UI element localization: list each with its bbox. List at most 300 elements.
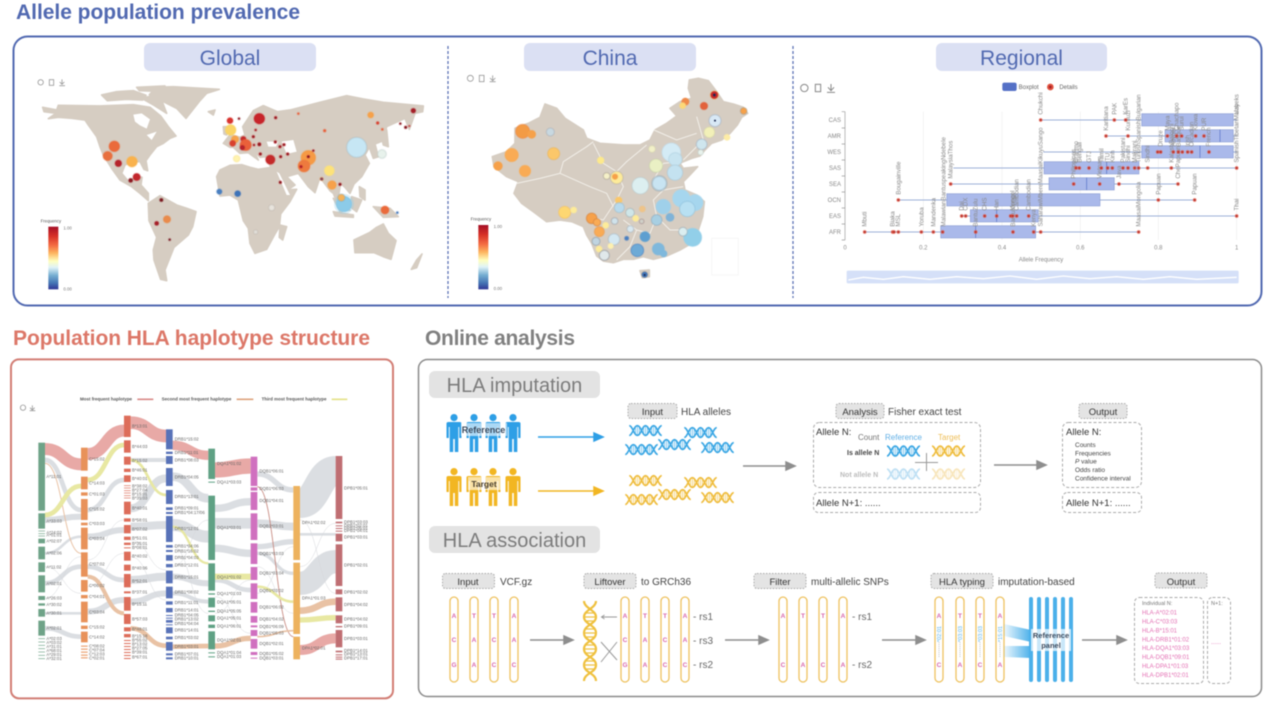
box: allele N contingency table: Reference bbox=[885, 433, 922, 442]
allele labels: B*15:11 bbox=[132, 601, 148, 606]
y axis labels: CAS bbox=[829, 118, 841, 124]
China bubble centres bbox=[644, 94, 716, 276]
x axis labels: 1 bbox=[1235, 245, 1239, 251]
allele labels: DPA1*01:03 bbox=[302, 595, 326, 600]
allele labels: DRB1*04:17/06 bbox=[175, 510, 205, 515]
allele labels: A*02:01 bbox=[46, 581, 62, 586]
allele labels: A*03:02 bbox=[46, 640, 62, 645]
allele labels: A*68:01 bbox=[46, 648, 62, 653]
allele labels: DPB1*02:02 bbox=[344, 589, 368, 594]
group: input haplotype bars: A bbox=[472, 662, 477, 669]
rotated sample labels: Pakistani bbox=[1120, 138, 1127, 163]
allele labels: B*57:03 bbox=[132, 616, 148, 621]
allele labels: DQA1*06:01 bbox=[217, 624, 242, 629]
allele labels: B*38:02 bbox=[132, 484, 148, 489]
allele labels: B*40:01 bbox=[132, 476, 148, 481]
rotated sample labels: French bbox=[1206, 127, 1213, 147]
rotated sample labels: Kinh bbox=[1109, 150, 1116, 163]
allele labels: DPB1*05:01 bbox=[344, 526, 368, 531]
rotated sample labels: KarEs bbox=[1123, 98, 1130, 115]
rotated sample labels: Philippines bbox=[1071, 149, 1078, 179]
box: individual N alleles: Individual N: bbox=[1142, 601, 1173, 607]
allele labels: DQA1*03:03 bbox=[217, 479, 242, 484]
group: liftover haplotype bars: A bbox=[683, 613, 688, 620]
group: input haplotype bars: T bbox=[472, 613, 476, 620]
allele labels: C*07:04 bbox=[89, 648, 105, 653]
allele labels: DQB1*06:01 bbox=[259, 468, 284, 473]
rotated sample labels: Java bbox=[1116, 165, 1123, 179]
group: input haplotype bars: A bbox=[512, 637, 517, 644]
allele labels: DQA1*05:01 bbox=[217, 600, 242, 605]
legend: frequency colour bar bbox=[41, 218, 72, 291]
rotated sample labels: Karitiana bbox=[1103, 106, 1110, 131]
allele labels: C*03:04 bbox=[89, 536, 105, 541]
rotated sample labels: Brahmo bbox=[1073, 141, 1080, 163]
group: target people: Target bbox=[471, 479, 497, 489]
group: liftover haplotype bars: A bbox=[643, 662, 648, 669]
allele labels: DPB1*05:01 bbox=[344, 485, 368, 490]
allele labels: DQA1*01:03 bbox=[217, 654, 242, 659]
legend: China frequency colour bar: Frequency bbox=[471, 217, 492, 222]
data zoom slider bbox=[847, 271, 1239, 283]
allele labels: B*35:03 bbox=[132, 495, 148, 500]
label: input VCF: Input bbox=[457, 577, 479, 588]
allele labels: A*31:01 bbox=[46, 644, 62, 649]
y axis labels: SAS bbox=[829, 166, 841, 172]
arrow: analysis to output bbox=[994, 461, 1046, 469]
panel: allele population prevalence bbox=[14, 36, 1262, 306]
legend: haplotype ranks: Third most frequent haplotype bbox=[262, 397, 327, 402]
allele labels: B*52:01 bbox=[132, 578, 148, 583]
label: filter: Filter bbox=[769, 577, 791, 588]
rotated sample labels: Basque bbox=[1176, 125, 1183, 147]
group: filtered haplotype bars: T bbox=[801, 613, 805, 620]
allele labels: B*07:02 bbox=[132, 527, 148, 532]
allele labels: A*29:01 bbox=[46, 652, 62, 657]
rotated sample labels: Mandenka bbox=[930, 197, 937, 227]
allele labels: DQA1*05:01 bbox=[217, 615, 242, 620]
group: liftover haplotype bars: T bbox=[663, 613, 667, 620]
box: output statistics: P value bbox=[1075, 458, 1097, 466]
panel: haplotype sankey bbox=[11, 359, 393, 698]
heading pill: Regional bbox=[936, 43, 1107, 71]
group: typing haplotype bars: *03:03 bbox=[958, 626, 964, 642]
China map chart bbox=[467, 75, 748, 291]
legend: haplotype ranks bbox=[80, 397, 347, 402]
allele labels: B*15:01 bbox=[132, 492, 148, 497]
allele labels: DRB1*04:04 bbox=[175, 621, 199, 626]
allele labels: A*11:01 bbox=[46, 474, 62, 479]
allele labels: A*30:01 bbox=[46, 610, 62, 615]
allele labels: B*27:05 bbox=[132, 646, 148, 651]
x axis labels: 0 bbox=[843, 245, 847, 251]
column: HLA-C bbox=[81, 448, 88, 658]
reference panel: panel bbox=[1041, 641, 1061, 650]
group: liftover haplotype bars: A bbox=[623, 613, 628, 620]
allele labels: DQB1*03:04 bbox=[259, 571, 284, 576]
box: individual N+1: ...... bbox=[1211, 640, 1221, 646]
label: association output: Output bbox=[1167, 577, 1196, 588]
group: reference people bbox=[446, 414, 520, 452]
most frequent haplotype flow bbox=[45, 423, 336, 650]
allele labels: DRB1*04:03 bbox=[175, 555, 199, 560]
box: individual N alleles: HLA-DQA1*03:03 bbox=[1142, 646, 1190, 652]
allele labels: DRB1*11:01 bbox=[175, 450, 199, 455]
title: allele population prevalence: Allele population prevalence bbox=[16, 1, 300, 24]
allele labels: DQA1*01:02 bbox=[217, 461, 242, 466]
allele labels: C*01:03 bbox=[89, 491, 105, 496]
group: liftover haplotype bars: - rs3 bbox=[693, 636, 713, 647]
group: liftover haplotype bars: C bbox=[683, 662, 688, 669]
x axis labels: 0.2 bbox=[919, 245, 928, 251]
label: analysis Fisher exact test: Analysis bbox=[842, 407, 878, 418]
allele labels: DRB1*14:01 bbox=[175, 628, 199, 633]
allele labels: DQB1*06:09 bbox=[259, 624, 284, 629]
allele labels: DRB1*04:06 bbox=[175, 544, 199, 549]
label: liftover: to GRCh36 bbox=[641, 577, 691, 588]
heading pill: China bbox=[524, 43, 696, 71]
column: HLA-DPB1 bbox=[336, 456, 342, 660]
arrow: reference to alleles bbox=[538, 433, 603, 441]
allele labels: DQB1*03:01 bbox=[259, 524, 284, 529]
allele labels: A*02:01 bbox=[46, 625, 62, 630]
rotated sample labels: KalashBalochi bbox=[1168, 124, 1175, 163]
allele labels: A*11:02 bbox=[46, 565, 62, 570]
rotated sample labels: MSL bbox=[895, 213, 902, 227]
rotated sample labels bbox=[862, 92, 1241, 227]
allele labels: C*03:04 bbox=[89, 609, 105, 614]
column: HLA-DQA1 bbox=[208, 449, 215, 657]
group: liftover haplotype bars bbox=[621, 597, 713, 682]
group: filtered haplotype bars bbox=[779, 597, 872, 682]
group: typing haplotype bars: *02:01 bbox=[937, 626, 943, 642]
panel: online analysis bbox=[418, 360, 1262, 696]
box: individual N alleles: HLA-DPA1*01:03 bbox=[1142, 664, 1189, 670]
allele labels: A*24:02 bbox=[46, 530, 62, 535]
allele labels: DQA1*01:02 bbox=[217, 574, 242, 579]
rotated sample labels: Sindhi bbox=[1125, 146, 1132, 163]
allele labels: DRB1*04:05 bbox=[175, 613, 199, 618]
rotated sample labels: TurkishSpanishBulgarian bbox=[1136, 94, 1143, 163]
box: output statistics: Allele N: bbox=[1066, 427, 1101, 438]
rotated sample labels: Irish bbox=[1184, 134, 1191, 147]
rotated sample labels: PAK bbox=[1111, 102, 1118, 115]
rotated sample labels: Bougainville bbox=[896, 161, 903, 195]
group: reference DNA bbox=[625, 426, 734, 454]
icon: vertical DNA helix bbox=[584, 601, 596, 681]
arrow: input to liftover bbox=[530, 636, 573, 644]
data bubbles: China bbox=[494, 91, 747, 278]
label: input HLA alleles: Input bbox=[642, 407, 663, 418]
label: output: Output bbox=[1089, 407, 1118, 418]
label: output bbox=[1079, 404, 1127, 418]
box: allele N contingency table: Not allele N bbox=[840, 472, 878, 479]
rotated sample labels: Thai bbox=[1234, 199, 1241, 211]
title: population HLA haplotype structure: Population HLA haplotype structure bbox=[13, 327, 370, 350]
rotated sample labels: Biaka bbox=[890, 211, 897, 227]
rotated sample labels: Sindhi bbox=[1145, 146, 1152, 163]
allele labels: DRB1*13:02 bbox=[175, 617, 199, 622]
group: target DNA bbox=[625, 476, 734, 504]
rotated sample labels: Vietnam bbox=[1097, 156, 1104, 179]
label: filter: multi-allelic SNPs bbox=[811, 577, 889, 588]
box: output statistics: Frequencies bbox=[1075, 450, 1112, 458]
data bubbles: global bbox=[103, 108, 416, 241]
box: output statistics: Odds ratio bbox=[1075, 467, 1105, 474]
group: filtered haplotype bars: T bbox=[821, 613, 825, 620]
allele labels: DPB1*02:01 bbox=[344, 523, 368, 528]
allele labels: DRB1*14:01 bbox=[175, 607, 199, 612]
x axis labels: 0.8 bbox=[1154, 245, 1163, 251]
title: online analysis: Online analysis bbox=[425, 327, 575, 350]
arrow: target to alleles bbox=[538, 487, 603, 495]
box: output N+1: Allele N+1: ...... bbox=[1066, 498, 1131, 509]
allele labels: C*03:03 bbox=[89, 521, 105, 526]
panel border bbox=[11, 359, 393, 698]
allele labels: B*13:02 bbox=[132, 642, 148, 647]
group: liftover haplotype bars: C bbox=[663, 662, 668, 669]
allele labels: DQB1*06:02 bbox=[259, 605, 284, 610]
rotated sample labels: Maya bbox=[1164, 115, 1171, 131]
allele labels: C*08:02 bbox=[89, 644, 105, 649]
label: filter bbox=[754, 574, 889, 588]
China province borders bbox=[517, 117, 703, 260]
group: filtered haplotype bars: - rs2 bbox=[852, 660, 872, 671]
group: liftover haplotype bars: - rs2 bbox=[693, 660, 713, 671]
allele labels: DRB1*11:01 bbox=[175, 600, 199, 605]
rotated sample labels: PUR bbox=[1201, 117, 1208, 131]
allele labels: DPB1*09:01 bbox=[344, 624, 368, 629]
column: HLA-A bbox=[38, 443, 45, 659]
allele labels: C*07:02 bbox=[89, 562, 105, 567]
legend: boxplot and details bbox=[1002, 83, 1078, 91]
medians bbox=[976, 130, 1220, 238]
arrow: alleles to analysis bbox=[743, 462, 795, 470]
group: typing haplotype bars: A bbox=[998, 613, 1003, 620]
rotated sample labels: Chukchi bbox=[1038, 92, 1045, 115]
box: individual N alleles bbox=[1134, 598, 1204, 684]
allele labels: B*58:01 bbox=[132, 517, 148, 522]
rotated sample labels: Han bbox=[994, 199, 1001, 211]
rotated sample labels: Adygei bbox=[1170, 128, 1177, 147]
group: filtered haplotype bars: A bbox=[801, 662, 806, 669]
group: filtered haplotype bars: C bbox=[781, 662, 786, 669]
box: output statistics bbox=[1062, 422, 1142, 488]
rotated sample labels: Papuan bbox=[1192, 173, 1199, 195]
allele labels: DQB1*05:03 bbox=[259, 630, 284, 635]
rotated sample labels: Yoruba bbox=[918, 207, 925, 227]
group: filtered haplotype bars: A bbox=[841, 613, 846, 620]
allele labels: DQB1*03:01 bbox=[259, 655, 284, 660]
rotated sample labels: SaharawiMbereMaasaiKikuyuSango bbox=[1038, 127, 1045, 227]
allele labels: DRB1*13:01 bbox=[175, 494, 199, 499]
allele labels: B*27:04 bbox=[132, 488, 148, 493]
label: liftover bbox=[584, 574, 691, 588]
allele labels: A*26:03 bbox=[46, 596, 62, 601]
box: individual N+1: N+1: bbox=[1211, 601, 1223, 607]
box: individual N alleles: HLA-DPB1*02:01 bbox=[1142, 673, 1189, 679]
allele labels: B*51:01 bbox=[132, 536, 148, 541]
label: input HLA alleles: HLA alleles bbox=[681, 407, 731, 418]
rotated sample labels: MalaysiaThos bbox=[948, 141, 955, 179]
allele labels: B*08:01 bbox=[132, 545, 148, 550]
group: typing haplotype bars: A bbox=[937, 613, 942, 620]
allele labels: DQA1*05:05 bbox=[217, 609, 242, 614]
allele labels: C*15:02 bbox=[89, 457, 105, 462]
rotated sample labels: Kuriluzi bbox=[1125, 110, 1132, 131]
legend: boxplot and details: Boxplot bbox=[1019, 85, 1039, 91]
heading pill: Global bbox=[144, 43, 316, 71]
rotated sample labels: ITU bbox=[1105, 153, 1112, 163]
world land masses bbox=[43, 86, 423, 281]
y axis labels: EAS bbox=[829, 214, 841, 220]
group: input haplotype bars: T bbox=[492, 613, 496, 620]
group: liftover haplotype bars: G bbox=[622, 662, 628, 669]
icon: sankey toolbar bbox=[20, 405, 35, 411]
rotated sample labels: BantuZulu bbox=[973, 198, 980, 227]
box: allele N contingency table bbox=[814, 422, 980, 488]
allele labels: A*02:07 bbox=[46, 539, 62, 544]
group: liftover haplotype bars: - rs1 bbox=[693, 612, 713, 623]
rotated sample labels: Mongol bbox=[1010, 190, 1017, 211]
group: liftover haplotype bars: C bbox=[623, 637, 628, 644]
x axis labels: 0.6 bbox=[1076, 245, 1085, 251]
group: typing haplotype bars: C bbox=[937, 662, 942, 669]
group: target people bbox=[446, 468, 520, 506]
allele labels: DQB1*03:03 bbox=[259, 551, 284, 556]
allele labels: C*02:01 bbox=[89, 655, 105, 660]
rotated sample labels: CHS bbox=[982, 198, 989, 211]
rotated sample labels: MaasaiMongolia bbox=[1136, 181, 1143, 227]
group: input haplotype bars: A bbox=[472, 637, 477, 644]
group: filtered haplotype bars: - rs1 bbox=[852, 612, 872, 623]
allele labels: B*40:02 bbox=[132, 553, 148, 558]
rotated sample labels: MalawianBantuspeakingNdebele bbox=[940, 136, 947, 227]
allele labels: B*40:01 bbox=[132, 505, 148, 510]
box: output statistics: Confidence interval bbox=[1075, 476, 1131, 482]
rotated sample labels: Kenya bbox=[1031, 209, 1038, 227]
regional boxplot chart bbox=[801, 83, 1241, 283]
South China Sea inset bbox=[712, 238, 738, 275]
allele labels: DPB1*17:01 bbox=[344, 655, 368, 660]
group: typing haplotype bars bbox=[935, 597, 1004, 682]
label: HLA typing: HLA typing bbox=[939, 577, 985, 588]
column: HLA-B bbox=[124, 416, 131, 659]
y axis labels: OCN bbox=[828, 198, 841, 204]
box: output statistics: Counts bbox=[1075, 442, 1096, 449]
allele labels: DRB1*03:01 bbox=[175, 644, 199, 649]
label: input HLA alleles bbox=[628, 404, 731, 418]
group: typing haplotype bars: *03:03 bbox=[978, 626, 984, 642]
allele labels: DPB1*14:01 bbox=[344, 648, 368, 653]
box: allele N+1 bbox=[814, 492, 980, 512]
allele labels: DRB1*16:02 bbox=[175, 548, 199, 553]
reference panel bbox=[1029, 597, 1073, 682]
allele labels: C*12:03 bbox=[89, 652, 105, 657]
rotated sample labels: Chachapo bbox=[1173, 102, 1180, 131]
allele labels: DQA1*01:03 bbox=[217, 591, 242, 596]
group: typing haplotype bars: C bbox=[978, 662, 983, 669]
y axis labels bbox=[827, 118, 842, 236]
detail points bbox=[863, 119, 1238, 233]
allele labels: A*01:01 bbox=[46, 533, 62, 538]
allele labels bbox=[46, 424, 368, 661]
allele labels: DPA1*02:02 bbox=[302, 520, 326, 525]
allele labels: C*14:03 bbox=[89, 480, 105, 485]
allele labels: DQB1*05:02 bbox=[259, 651, 284, 656]
allele labels: DPB1*02:01 bbox=[344, 562, 368, 567]
box: individual N alleles: HLA-B*15:01 bbox=[1142, 628, 1178, 634]
box: individual N alleles: HLA-A*02:01 bbox=[1142, 610, 1178, 616]
group: typing haplotype bars: T bbox=[958, 613, 962, 620]
box: individual N alleles: HLA-C*03:03 bbox=[1142, 620, 1178, 626]
allele labels: DRB1*10:01 bbox=[175, 655, 199, 660]
allele labels: DRB1*12:01 bbox=[175, 563, 199, 568]
icon: map toolbar bbox=[38, 79, 65, 86]
rotated sample labels: Orcadian bbox=[1188, 121, 1195, 147]
legend: frequency colour bar: Frequency bbox=[41, 218, 62, 223]
heading pill: HLA association: HLA association bbox=[443, 530, 586, 552]
allele labels: DQA1*03:01 bbox=[217, 525, 242, 530]
legend: China frequency colour bar: 0.00 bbox=[494, 286, 503, 291]
allele labels: DRB1*04:05 bbox=[175, 474, 199, 479]
heading pill: China: China bbox=[583, 47, 638, 70]
x axis labels: Allele Frequency bbox=[1019, 257, 1063, 263]
rotated sample labels: Dai bbox=[959, 201, 966, 211]
group: liftover haplotype bars: A bbox=[643, 637, 648, 644]
allele labels: B*37:01 bbox=[132, 589, 148, 594]
group: filtered haplotype bars: A bbox=[781, 613, 786, 620]
allele labels: A*32:01 bbox=[46, 656, 62, 661]
icon: China toolbar bbox=[467, 75, 496, 82]
arrow: liftover to filter bbox=[725, 636, 768, 644]
allele labels: B*44:03 bbox=[132, 444, 148, 449]
allele labels: B*40:06 bbox=[132, 565, 148, 570]
rotated sample labels: Cambodian bbox=[1026, 179, 1033, 211]
group: input haplotype bars: A bbox=[452, 613, 457, 620]
group: liftover haplotype bars: C bbox=[663, 637, 668, 644]
group: filtered haplotype bars: C bbox=[821, 662, 826, 669]
column: HLA-DPA1 bbox=[293, 486, 300, 659]
box: allele N contingency table: Count bbox=[858, 433, 880, 442]
rotated sample labels: CDX bbox=[963, 198, 970, 211]
allele labels: A*02:06 bbox=[46, 550, 62, 555]
allele labels: A*30:02 bbox=[46, 602, 62, 607]
second most frequent haplotype flow bbox=[45, 463, 336, 647]
heading pill: HLA imputation bbox=[429, 371, 600, 398]
allele labels: B*13:01 bbox=[132, 424, 148, 429]
column: HLA-DRB1 bbox=[166, 429, 173, 659]
group: liftover haplotype bars: A bbox=[683, 637, 688, 644]
allele labels: DRB1*12:01 bbox=[175, 526, 199, 531]
group: filtered haplotype bars: A bbox=[841, 662, 846, 669]
legend: haplotype ranks: Second most frequent haplotype bbox=[162, 397, 232, 402]
label: liftover: Liftover bbox=[594, 577, 626, 588]
rotated sample labels: Bengali bbox=[1076, 142, 1083, 163]
boxes bbox=[941, 114, 1233, 238]
whiskers bbox=[865, 120, 1237, 232]
group: input haplotype bars: C bbox=[452, 637, 457, 644]
group: typing haplotype bars: A bbox=[958, 662, 963, 669]
China land mass bbox=[492, 78, 748, 278]
allele labels: DQA1*02:01 bbox=[217, 638, 242, 643]
group: input haplotype bars: G bbox=[451, 662, 457, 669]
label: HLA typing: imputation-based bbox=[998, 577, 1075, 588]
x axis labels bbox=[843, 245, 1239, 263]
group: input haplotype bars: C bbox=[512, 662, 517, 669]
allele labels: DPB1*13:01 bbox=[344, 652, 368, 657]
y axis labels: AFR bbox=[829, 230, 842, 236]
